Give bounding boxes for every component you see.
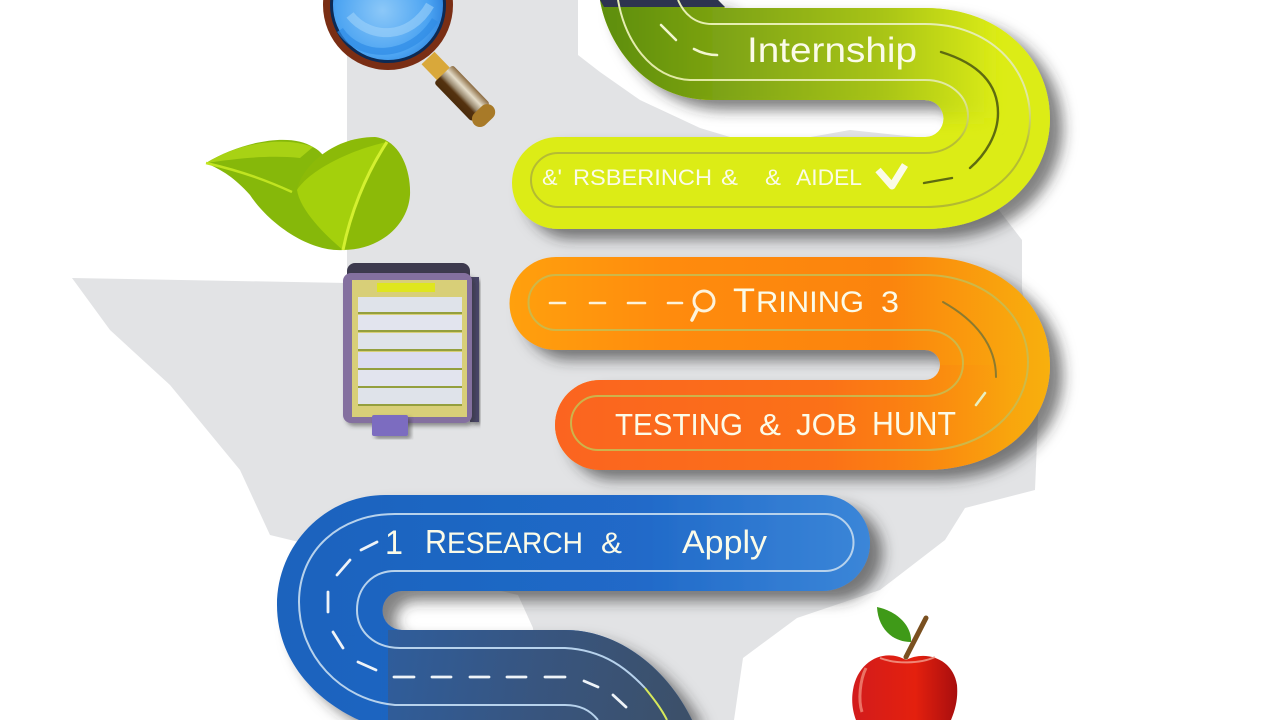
icon: clipboard checklist (343, 263, 479, 436)
label: Testing and Job Hunt (615, 405, 956, 442)
label: Testing and Job Hunt: JOB (796, 407, 857, 442)
lime road center dashes (661, 25, 717, 55)
background state map silhouette (72, 0, 1040, 720)
label: Research and (425, 523, 622, 560)
label: garbled research and aid step: AIDEL (796, 165, 862, 190)
label: garbled research and aid step: & (721, 165, 738, 190)
label: Training 3: T (733, 282, 755, 320)
panel: step 3 orange training and job hunt road (510, 257, 1050, 475)
label: Internship: Internship (747, 31, 917, 70)
orange road edge line (528, 275, 1028, 450)
label: garbled research and aid step: &' (542, 165, 562, 190)
icon: red apple (852, 607, 957, 720)
lime road edge lines (531, 0, 1030, 207)
panel: step 4 lime internship road (512, 0, 1050, 229)
label: garbled research and aid step (542, 165, 862, 190)
orange road dashes (550, 302, 682, 304)
icon: small magnifier (692, 291, 714, 320)
blue road edge lines (299, 514, 854, 720)
icon: check mark (878, 165, 905, 186)
label: Training 3: RINING (756, 286, 864, 319)
icon: magnifying glass (323, 0, 498, 130)
label: Research and: R (425, 523, 447, 560)
label: garbled research and aid step: RSBERINCH (573, 165, 712, 190)
label: Testing and Job Hunt: & (759, 407, 781, 442)
road top dark asphalt (600, 0, 725, 7)
label: Research and: ESEARCH (447, 527, 583, 560)
label: Research and: & (601, 527, 622, 560)
infographic: winding career road over state map (72, 0, 1074, 720)
label: garbled research and aid step: & (765, 165, 781, 190)
label: Training 3 (733, 282, 899, 320)
panel: step 1 blue research and apply road (277, 495, 870, 720)
label: Testing and Job Hunt: TESTING (615, 407, 743, 442)
blue road dashes (328, 542, 626, 707)
label: step number 1: 1 (385, 524, 403, 562)
label: Training 3: 3 (881, 286, 899, 319)
icon: green leaves (206, 137, 410, 250)
label: Testing and Job Hunt: HUNT (872, 405, 956, 442)
label: Apply: Apply (682, 524, 767, 560)
